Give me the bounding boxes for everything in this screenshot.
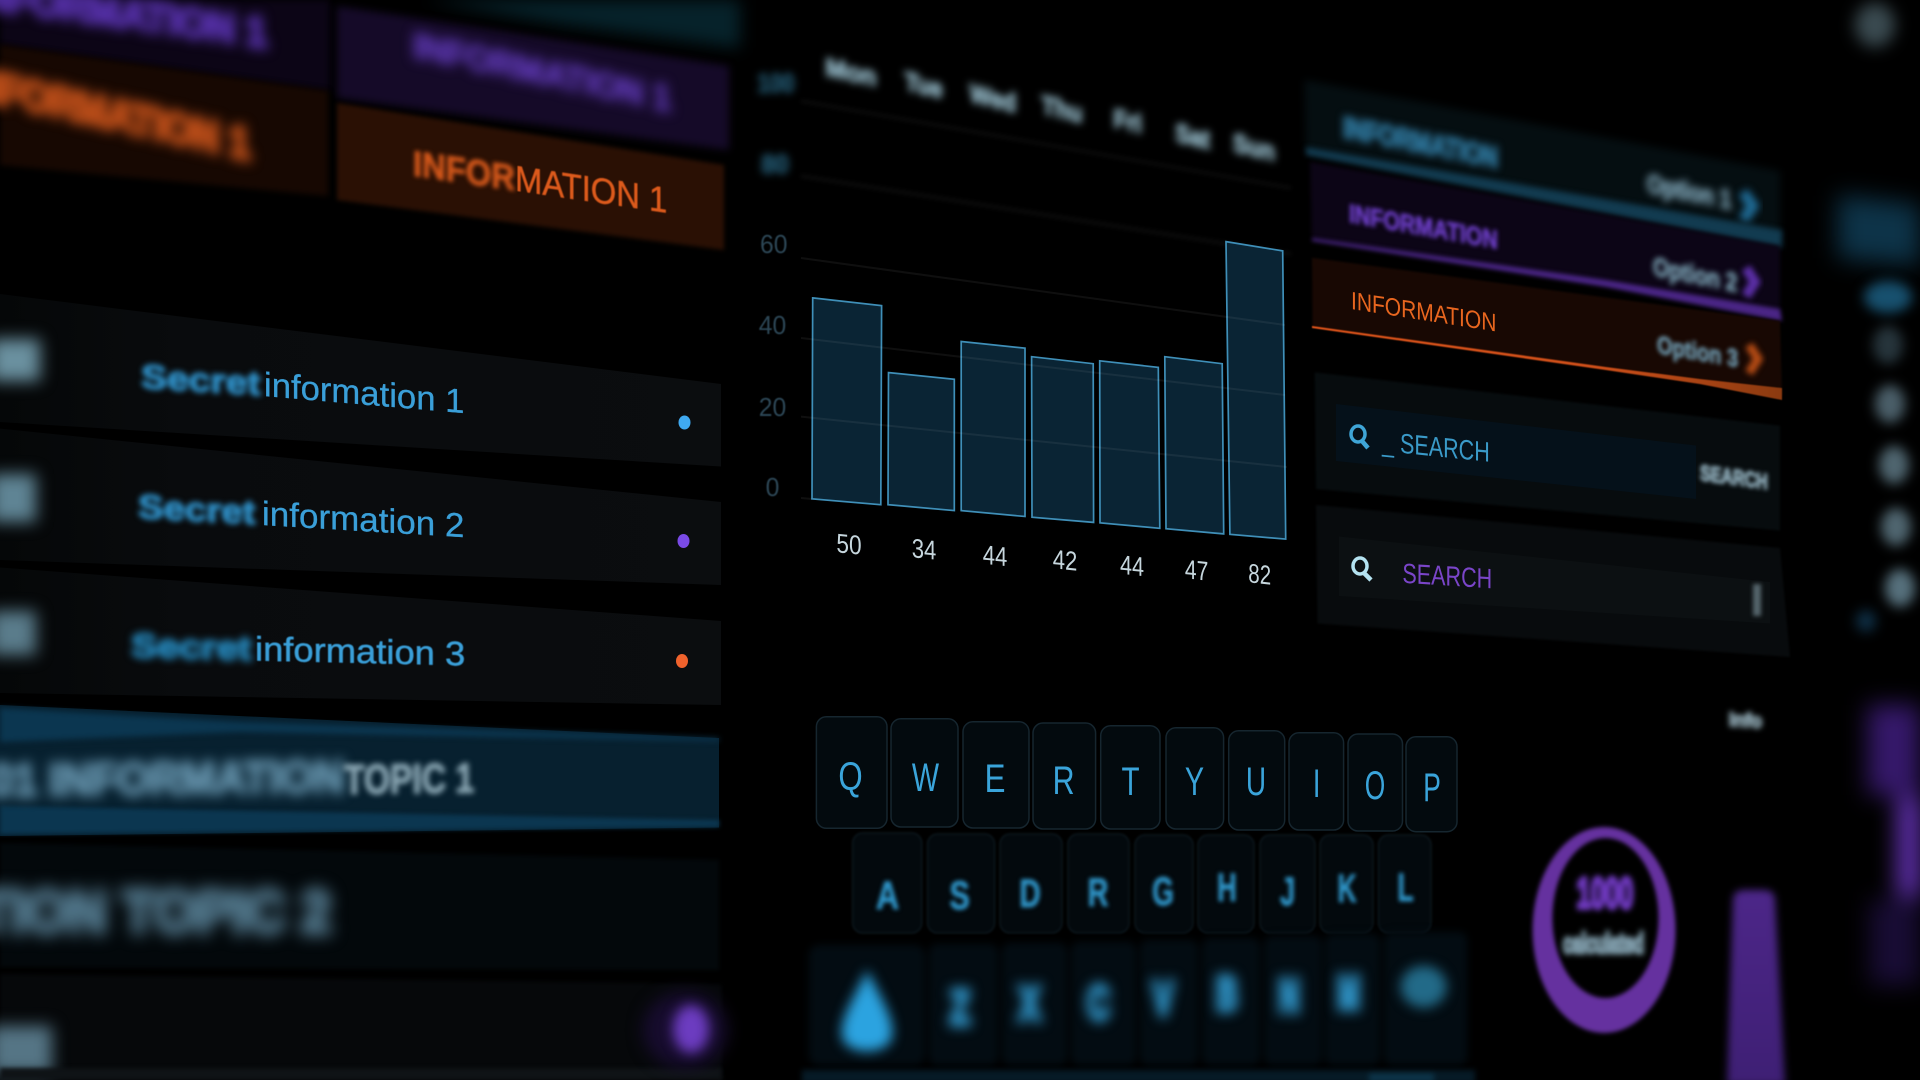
chart y axis labels: 20	[759, 393, 786, 422]
icon: backspace key	[1401, 966, 1447, 1008]
panel: topic 2 row	[0, 843, 719, 970]
chart day labels: Wed	[970, 79, 1016, 119]
small grey label: Info	[1729, 709, 1762, 733]
banner left label: 01 INFORMATION	[0, 752, 344, 806]
keyboard row 1 letters: E	[985, 756, 1005, 801]
keyboard row 1	[816, 717, 1457, 832]
keyboard row 2 letters: S	[949, 873, 970, 918]
keyboard row 2 letters: A	[876, 873, 899, 918]
keyboard row 3 letters	[950, 967, 1360, 1035]
keyboard row 3 letters: V	[1153, 972, 1173, 1026]
keyboard row 1 letters: W	[912, 755, 939, 800]
search input 1	[1336, 404, 1696, 499]
icon: magnifier pale	[1353, 558, 1371, 580]
keyboard row 1 letters: O	[1365, 764, 1385, 808]
row 2 dot	[678, 534, 690, 548]
search placeholder 2: SEARCH	[1402, 558, 1492, 595]
chart day labels: Sun	[1233, 129, 1275, 167]
search input 2	[1339, 536, 1770, 624]
orange underline	[1312, 326, 1782, 400]
chart value labels: 44	[1120, 551, 1144, 583]
chart grid lines upper	[801, 101, 1291, 254]
top teal band	[425, 0, 740, 48]
blue row label: INFORMATION	[1343, 110, 1498, 175]
chart day labels: Sat	[1176, 119, 1210, 155]
purple underline	[1312, 238, 1782, 321]
banner right label: TOPIC 1	[344, 756, 474, 804]
orange row	[1312, 258, 1782, 400]
orange tab right label	[413, 144, 667, 221]
purple tab right label: INFORMATION 1	[413, 25, 671, 120]
panel: search box 1	[1315, 372, 1780, 530]
row 1 label: information 1	[264, 366, 464, 421]
keyboard row 3 letters: N	[1279, 969, 1299, 1023]
keyboard row 1 letters: U	[1246, 760, 1266, 804]
panel: right information stack	[1304, 80, 1782, 400]
panel: far right column	[1838, 3, 1920, 985]
banner bottom stripe	[0, 806, 719, 834]
row 2	[0, 429, 721, 585]
keyboard row 3	[809, 932, 1467, 1065]
blurred start of label: INFOR	[413, 144, 515, 199]
keyboard row 3 letters: Z	[950, 981, 970, 1035]
row 3 index	[0, 611, 36, 655]
gauge caption: calculated	[1563, 927, 1644, 959]
blue row	[1304, 80, 1782, 248]
panel: topic 1 banner	[0, 705, 719, 836]
purple tab left	[0, 0, 330, 91]
row 3 dot	[676, 654, 688, 668]
keyboard row 1 letters: Y	[1185, 759, 1204, 804]
chart day labels	[826, 53, 1275, 167]
gauge ring	[1533, 827, 1676, 1033]
purple vertical bar	[1727, 890, 1785, 1080]
icon: magnifier blue	[1351, 426, 1368, 448]
chart value labels: 47	[1185, 555, 1208, 587]
keyboard row 3 letters: X	[1019, 976, 1040, 1031]
keyboard row 2 letters: R	[1088, 870, 1108, 915]
keyboard row 3 letters: M	[1338, 967, 1360, 1020]
chart value labels: 42	[1053, 545, 1077, 577]
keyboard row 2 letters: H	[1217, 866, 1237, 910]
row 3 secret word: Secret	[131, 627, 252, 668]
purple row	[1310, 162, 1782, 321]
row 1	[0, 294, 721, 466]
chart bars	[812, 242, 1286, 539]
icon: blue chevron	[1743, 192, 1753, 220]
top corner blob	[1855, 3, 1895, 47]
keyboard row 2 letters: K	[1337, 867, 1357, 911]
panel: bottom left row	[0, 974, 727, 1080]
chart y axis labels: 80	[761, 150, 789, 179]
panel: top left information tabs	[0, 0, 740, 250]
row 2 index	[0, 474, 36, 522]
purple row label: INFORMATION	[1349, 199, 1498, 255]
far right header	[1838, 195, 1920, 265]
row 2 secret word: Secret	[138, 487, 255, 532]
keyboard	[802, 717, 1475, 1080]
blue underline	[1306, 147, 1782, 248]
sharp end of label: MATION 1	[515, 159, 667, 221]
orange row label: INFORMATION	[1351, 286, 1496, 337]
icon: purple chevron	[1746, 268, 1755, 296]
chart day labels: Thu	[1042, 91, 1082, 129]
keyboard row 1 letters: R	[1053, 758, 1075, 803]
keyboard row 3 letters: C	[1087, 975, 1110, 1030]
gauge value: 1000	[1577, 869, 1633, 918]
search placeholder 1: _ SEARCH	[1381, 426, 1490, 468]
keyboard row 2 letters: L	[1397, 866, 1414, 910]
row index	[0, 1026, 52, 1074]
keyboard row 2	[853, 833, 1431, 933]
keyboard row 2 letters: D	[1019, 872, 1041, 916]
purple row option: Option 2	[1653, 253, 1737, 298]
icon: purple glow dot	[643, 992, 727, 1068]
row 1 dot	[678, 416, 690, 430]
purple tab right	[337, 6, 729, 150]
chart value labels: 50	[836, 529, 862, 561]
bottom edge	[0, 1068, 722, 1080]
icon list blobs	[1856, 281, 1915, 632]
search side label: SEARCH	[1700, 462, 1768, 495]
keyboard row 1 letters: Q	[838, 754, 863, 799]
icon: shift key	[842, 970, 892, 1051]
row 1 index	[0, 339, 40, 381]
row 1 secret word: Secret	[141, 357, 260, 403]
keyboard row 2 letters: J	[1280, 870, 1295, 914]
banner top stripe	[0, 708, 719, 742]
search cursor	[1753, 584, 1761, 616]
chart value labels: 82	[1248, 559, 1271, 591]
chart day labels: Tue	[905, 67, 943, 105]
chart y axis labels	[758, 69, 794, 502]
purple side shape	[1868, 705, 1920, 985]
chart y axis labels: 100	[758, 69, 794, 98]
keyboard row 1 letters: I	[1313, 762, 1320, 806]
chart y axis labels: 0	[766, 473, 779, 502]
keyboard row 2 letters: G	[1152, 870, 1174, 914]
panel: secret information list	[0, 294, 721, 705]
orange row option: Option 3	[1657, 330, 1738, 373]
keyboard bottom row	[802, 1070, 1475, 1080]
keyboard row 3 letters: B	[1216, 968, 1238, 1021]
chart value labels	[836, 529, 1271, 591]
icon: orange chevron	[1749, 345, 1758, 373]
panel: search box 2	[1316, 505, 1790, 657]
keyboard row 1 letters	[838, 754, 1441, 810]
chart day labels: Fri	[1114, 104, 1142, 140]
row 3	[0, 568, 721, 705]
blue row option: Option 1	[1647, 170, 1731, 215]
chart day labels: Mon	[826, 53, 876, 92]
chart y axis labels: 60	[760, 230, 787, 259]
orange tab right	[337, 103, 724, 250]
orange tab left	[0, 45, 328, 196]
chart value labels: 34	[912, 534, 937, 566]
chart y axis labels: 40	[759, 311, 786, 340]
keyboard row 2 letters	[876, 866, 1414, 918]
bar chart	[758, 53, 1291, 591]
chart value labels: 44	[983, 541, 1008, 573]
row 3 label: information 3	[255, 631, 465, 673]
row 2 label: information 2	[262, 495, 464, 545]
keyboard row 1 letters: T	[1121, 760, 1140, 804]
keyboard row 1 letters: P	[1423, 766, 1441, 810]
